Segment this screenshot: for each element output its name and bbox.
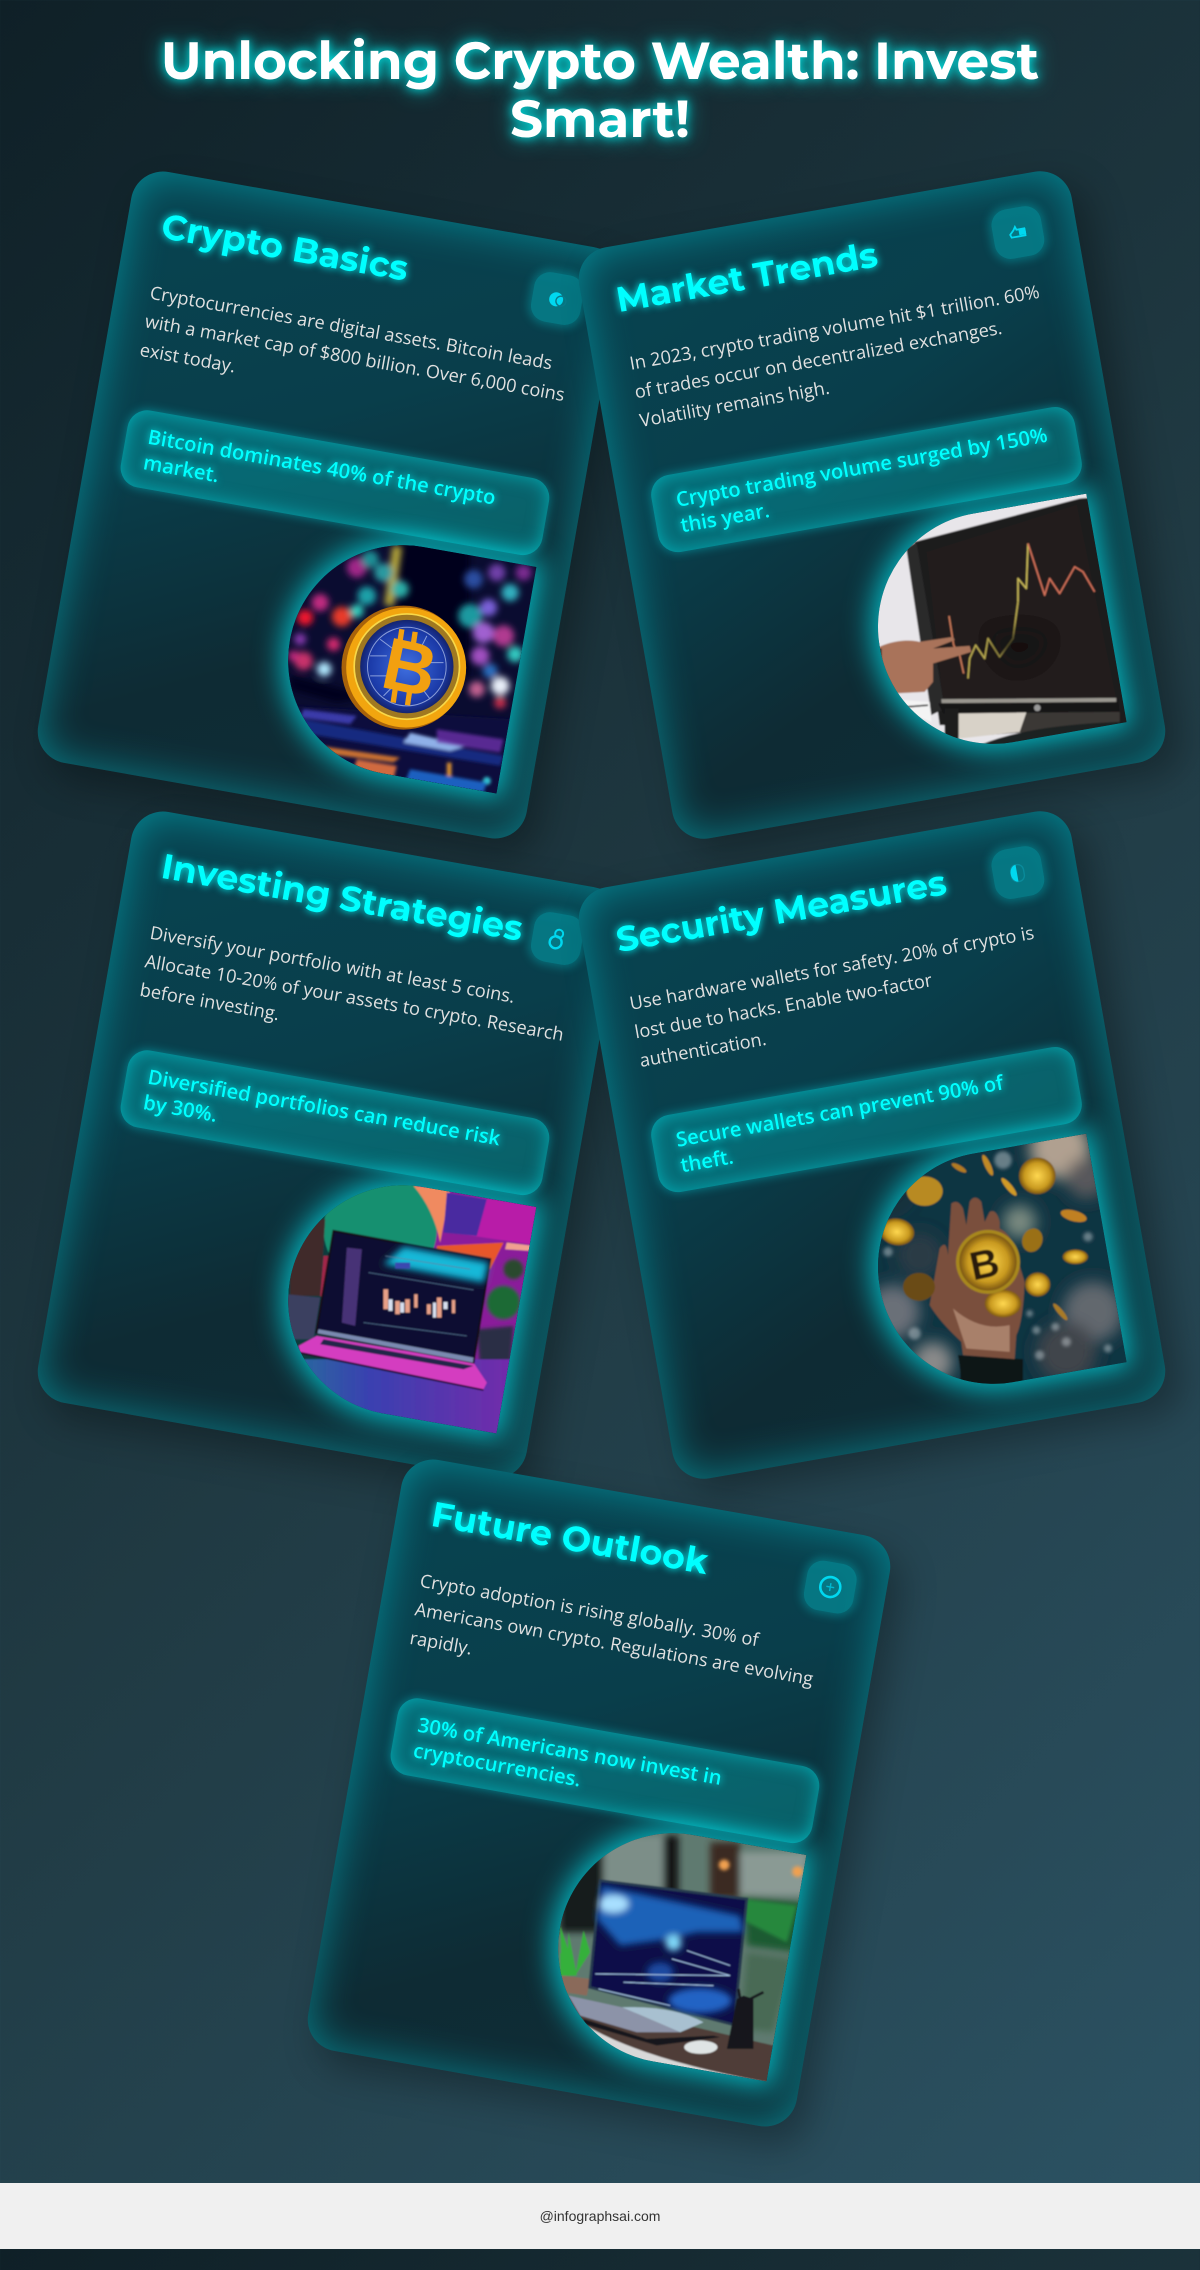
text block: Use hardware wallets for safety. 20% of crypto is xyxy=(628,921,1036,1016)
callout xyxy=(648,1044,1085,1195)
heading: Security Measures xyxy=(613,860,950,961)
text block: exist today. xyxy=(138,338,238,378)
text block: lost due to hacks. Enable two-factor xyxy=(633,968,934,1044)
text block: Americans own crypto. Regulations are evolving xyxy=(413,1597,815,1691)
text block: before investing. xyxy=(138,978,281,1026)
callout: Diversified portfolios can reduce risk xyxy=(146,1062,503,1151)
footer xyxy=(0,2183,1200,2249)
icon: target xyxy=(801,1558,859,1616)
image: hand holding bitcoin: B xyxy=(966,1240,1003,1289)
icon: shield xyxy=(989,844,1047,901)
title xyxy=(150,28,1048,151)
text block: rapidly. xyxy=(408,1626,474,1660)
text block: Cryptocurrencies are digital assets. Bitcoin leads xyxy=(148,281,554,375)
text block xyxy=(628,280,1041,432)
callout: Crypto trading volume surged by 150% xyxy=(674,420,1049,513)
icon: hand xyxy=(989,204,1047,261)
text block: authentication. xyxy=(638,1027,768,1072)
callout xyxy=(387,1695,822,1846)
callout: Bitcoin dominates 40% of the crypto xyxy=(146,422,498,511)
image: bitcoin coin: B xyxy=(375,622,444,713)
panel: Future Outlook xyxy=(303,1454,895,2132)
callout: Secure wallets can prevent 90% of xyxy=(674,1068,1005,1153)
callout: market. xyxy=(141,447,221,488)
title: Unlocking Crypto Wealth: Invest xyxy=(161,30,1039,93)
heading: Future Outlook xyxy=(428,1492,712,1583)
heading: Investing Strategies xyxy=(158,844,526,950)
text block: Volatility remains high. xyxy=(638,375,831,432)
callout: 30% of Americans now invest in xyxy=(416,1710,724,1791)
text block: with a market cap of $800 billion. Over 6,000 coins xyxy=(143,309,567,407)
image: trading monitor xyxy=(860,494,1127,762)
callout: by 30%. xyxy=(141,1087,220,1128)
heading: Crypto Basics xyxy=(158,204,412,290)
panel: Crypto Basics xyxy=(33,166,625,844)
text block: Crypto adoption is rising globally. 30% of xyxy=(418,1569,761,1652)
text block xyxy=(628,921,1036,1072)
image: bitcoin coin xyxy=(270,527,536,793)
footer: @infographsai.com xyxy=(540,2208,660,2224)
panel: Security Measures xyxy=(574,806,1170,1484)
callout xyxy=(648,404,1085,555)
callout xyxy=(117,407,552,558)
image: laptop with charts xyxy=(270,1167,536,1433)
text block: In 2023, crypto trading volume hit $1 trillion. 60% xyxy=(628,280,1041,376)
image: monitor with world map xyxy=(540,1815,806,2081)
text block: Diversify your portfolio with at least 5 coins. xyxy=(148,921,517,1009)
text block: Allocate 10-20% of your assets to crypto. Research xyxy=(143,949,566,1047)
callout: cryptocurrencies. xyxy=(411,1735,583,1792)
callout: theft. xyxy=(678,1142,735,1178)
callout: this year. xyxy=(678,495,771,538)
image: hand holding bitcoin xyxy=(860,1134,1127,1402)
callout xyxy=(117,1047,552,1198)
title: Smart! xyxy=(510,88,690,151)
panel: Investing Strategies xyxy=(33,806,625,1484)
icon: coin blob xyxy=(528,270,586,327)
icon: wallet glyph xyxy=(528,910,586,967)
heading: Market Trends xyxy=(613,233,881,321)
panel: Market Trends xyxy=(574,166,1170,844)
text block: of trades occur on decentralized exchanges. xyxy=(633,316,1004,404)
